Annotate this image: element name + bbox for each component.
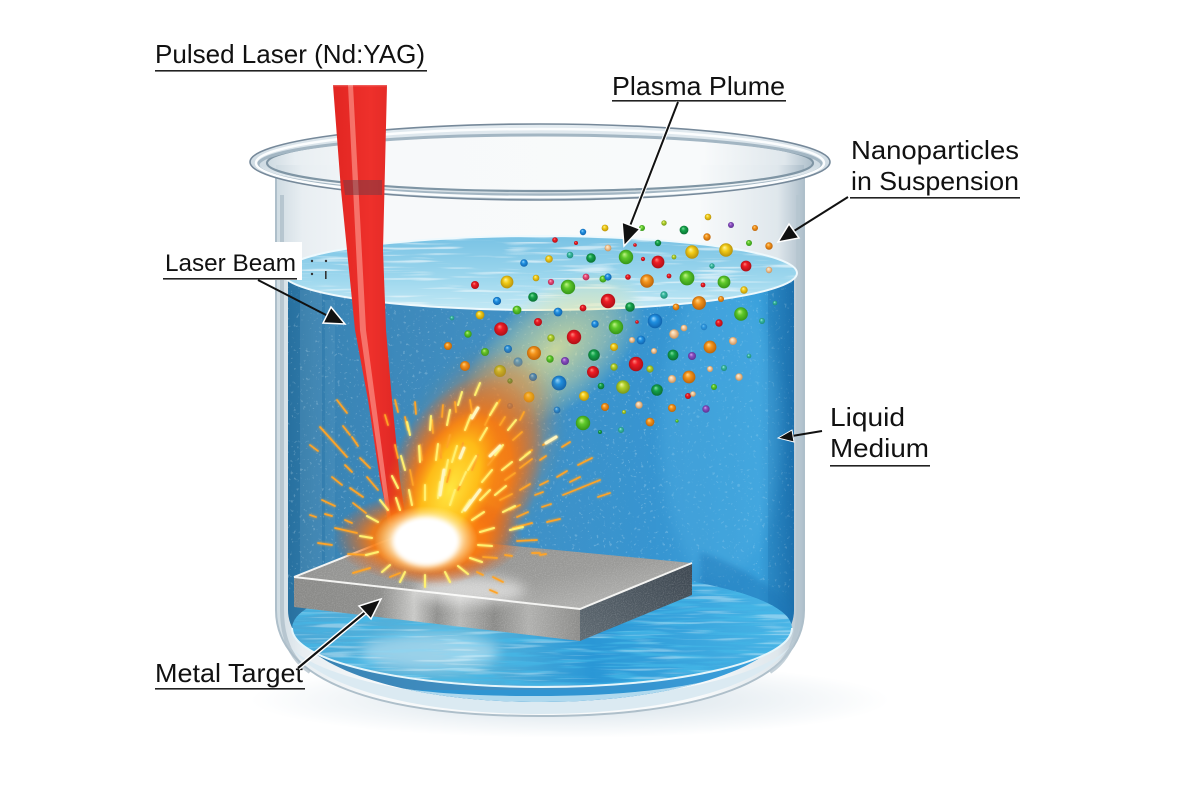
plume yellow core	[381, 396, 519, 584]
beam top fade	[328, 80, 392, 87]
beaker base glass	[286, 640, 794, 714]
panel: liquid medium	[283, 236, 797, 702]
rim ring	[250, 124, 830, 200]
liquid surface	[283, 236, 797, 310]
label: liquid medium	[830, 402, 930, 467]
label: liquid medium: Medium	[830, 433, 929, 463]
target bright edges	[294, 535, 692, 609]
beam highlight	[348, 85, 392, 525]
label: nanoparticles in suspension: in Suspension	[851, 166, 1019, 196]
beaker ground shadow	[250, 662, 890, 738]
artifact dots near the laser label	[311, 260, 327, 279]
rim highlight	[256, 129, 824, 197]
rim outer line	[250, 124, 830, 200]
arrow: liquid medium	[778, 430, 822, 442]
floor ellipse edge	[292, 628, 792, 687]
rim dark band	[267, 135, 813, 191]
panel: nanoparticles in suspension	[444, 214, 777, 434]
label: laser beam: Laser Beam	[165, 250, 296, 277]
plasma haze	[437, 240, 673, 460]
beaker glass body	[276, 165, 804, 716]
beaker right wall highlight	[770, 195, 798, 672]
target side face	[580, 563, 692, 641]
label background: laser beam	[158, 242, 302, 280]
panel: glass beaker	[268, 136, 812, 716]
arrow: laser beam	[258, 280, 345, 324]
arrow: metal target	[298, 599, 381, 668]
label: plasma plume: Plasma Plume	[612, 71, 785, 101]
beaker interior back	[268, 136, 812, 190]
arrow: nanoparticles	[778, 197, 848, 242]
central flash	[394, 518, 458, 566]
label: liquid medium: Liquid	[830, 402, 905, 432]
plume white hot spot	[374, 506, 478, 574]
plume outer glow	[348, 349, 576, 615]
target top face	[294, 535, 692, 609]
beaker left wall highlight	[282, 195, 310, 672]
yellow sparks	[360, 383, 530, 587]
panel: beaker rim	[250, 124, 830, 200]
plume far glow	[382, 340, 574, 570]
liquid body	[288, 273, 794, 702]
target glare	[415, 576, 525, 604]
liquid floor ripples	[292, 570, 792, 686]
target grain	[294, 546, 692, 641]
rim mid band	[258, 135, 822, 195]
label: nanoparticles in suspension: Nanoparticles	[851, 135, 1019, 165]
big white-hot streaks	[440, 408, 556, 510]
panel: plume and sparks	[310, 340, 610, 615]
metal target	[294, 542, 692, 641]
orange sparks	[310, 400, 610, 593]
beaker outline	[276, 178, 804, 716]
beam rim crossing tint	[343, 180, 382, 195]
laser beam	[328, 80, 408, 535]
beam body	[333, 85, 408, 535]
liquid bubble texture	[288, 273, 794, 702]
label: pulsed laser: Pulsed Laser (Nd:YAG)	[155, 39, 425, 69]
label: metal target: Metal Target	[155, 658, 304, 688]
label: nanoparticles in suspension	[850, 135, 1020, 199]
plume lower glow	[333, 492, 523, 584]
arrow: plasma plume	[622, 102, 678, 246]
target front face	[294, 577, 580, 641]
